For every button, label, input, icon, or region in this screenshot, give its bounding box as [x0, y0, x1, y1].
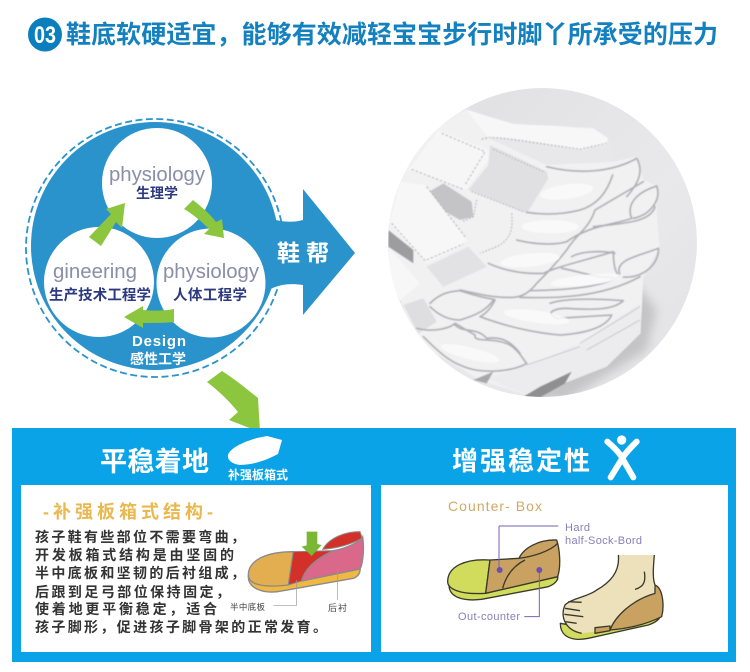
arrow: green top to right	[184, 200, 224, 238]
heading: stable landing: 平稳着地	[100, 447, 209, 477]
strap: middle	[426, 191, 445, 212]
label: counter: 后衬	[328, 602, 347, 613]
label: design: Design	[132, 333, 186, 350]
illustration: shoe cross section	[248, 532, 363, 605]
white card	[381, 485, 728, 652]
arrow: to shoe upper	[268, 189, 355, 315]
circle: engineering: gineering	[53, 261, 137, 283]
circle: physiology: physiology	[109, 164, 205, 186]
collar	[496, 119, 608, 139]
wing lines	[417, 158, 658, 371]
body text: 孩子脚形，促进孩子脚骨架的正常发育。	[35, 619, 327, 635]
photo: white winged shoe	[387, 88, 697, 400]
label: half midsole: 半中底板	[230, 602, 265, 612]
illustration: shoe with counter box	[448, 526, 560, 617]
icon: white shoe sole	[228, 436, 282, 465]
circle: human engineering: physiology	[163, 261, 259, 283]
dashed ring	[26, 119, 284, 377]
panel: enhanced stability	[381, 435, 728, 652]
circle: physiology: 生理学	[136, 185, 178, 201]
illustration: foot in counter	[560, 555, 663, 639]
body text	[35, 529, 327, 635]
body text: 后跟到足弓部位保持固定，	[35, 584, 230, 600]
circle: human engineering: 人体工程学	[173, 286, 247, 304]
title text: 鞋底软硬适宜，能够有效减轻宝宝步行时脚丫所承受的压力	[66, 21, 718, 49]
labels: parts	[458, 522, 642, 623]
body text: 半中底板和坚韧的后衬组成，	[35, 565, 245, 581]
velcro: top	[468, 145, 548, 213]
sole	[565, 334, 640, 383]
wing highlights	[549, 256, 624, 320]
icon: person	[607, 435, 637, 477]
labels: parts: Out-counter	[458, 611, 520, 623]
strap: low	[390, 266, 400, 300]
labels: parts: half-Sock-Bord	[565, 535, 642, 547]
circle: physiology	[102, 128, 212, 238]
body text: 孩子鞋有些部位不需要弯曲，	[35, 529, 245, 545]
circle: human engineering	[156, 228, 266, 338]
arrow: green left to top	[89, 203, 125, 246]
body text: 使着地更平衡稳定，适合	[35, 601, 217, 617]
title	[28, 18, 718, 52]
white card	[21, 485, 371, 652]
body text: 开发板箱式结构是由坚固的	[35, 547, 234, 563]
gaps between straps	[427, 183, 473, 220]
label: shoe upper: 鞋帮	[277, 240, 329, 266]
card heading: -补强板箱式结构-	[43, 502, 213, 522]
shoe body	[387, 109, 659, 397]
label: counter box: Counter- Box	[448, 498, 542, 514]
heading: enhanced stability: 增强稳定性	[452, 446, 590, 476]
label: design	[130, 333, 186, 367]
soft shadow	[534, 288, 658, 397]
circle: engineering: 生产技术工程学	[49, 286, 151, 304]
strap: top	[408, 130, 490, 190]
diagram: shoe upper cycle	[26, 119, 355, 377]
icon: number badge 03	[28, 18, 62, 52]
label: box style: 补强板箱式	[228, 467, 288, 482]
circle: engineering	[44, 227, 154, 337]
upper stitching	[462, 200, 512, 253]
labels: parts: Hard	[565, 522, 590, 534]
arrow: green right to left	[124, 306, 174, 328]
arrow: large green down	[207, 371, 260, 432]
big blue circle	[31, 122, 279, 370]
panel: stable landing	[21, 436, 371, 652]
velcro: middle	[427, 247, 487, 287]
label: design: 感性工学	[130, 351, 186, 367]
icon: number badge 03: 03	[34, 22, 56, 49]
panel: bottom blue band	[12, 428, 736, 662]
